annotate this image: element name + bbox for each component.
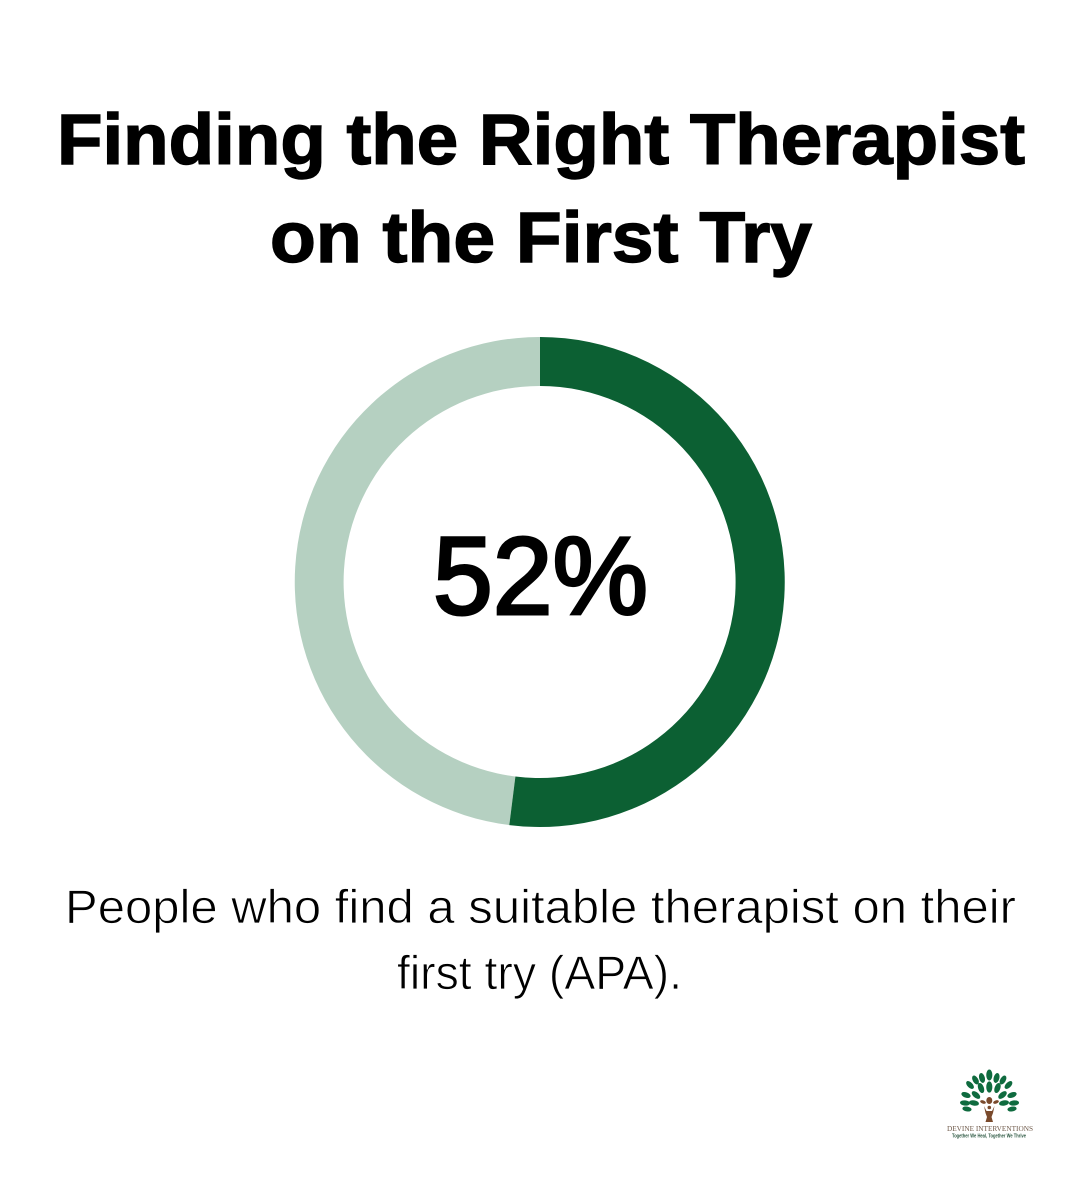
caption: People who find a suitable therapist on their [65,880,1016,933]
caption [65,880,1016,999]
title: on the First Try [270,199,813,278]
logo: Devine Interventions [947,1070,1033,1140]
logo name: DEVINE INTERVENTIONS [947,1125,1033,1133]
donut remainder segment [295,337,540,825]
icon: tree leaves [960,1070,1019,1112]
icon: person trunk [980,1097,999,1122]
donut chart: 52% [295,337,785,827]
caption: first try (APA). [397,946,682,999]
logo tagline: Together We Heal, Together We Thrive [952,1134,1026,1140]
donut value segment [509,337,785,827]
percentage value: 52% [433,515,648,638]
title [57,101,1025,278]
title: Finding the Right Therapist [57,101,1025,180]
